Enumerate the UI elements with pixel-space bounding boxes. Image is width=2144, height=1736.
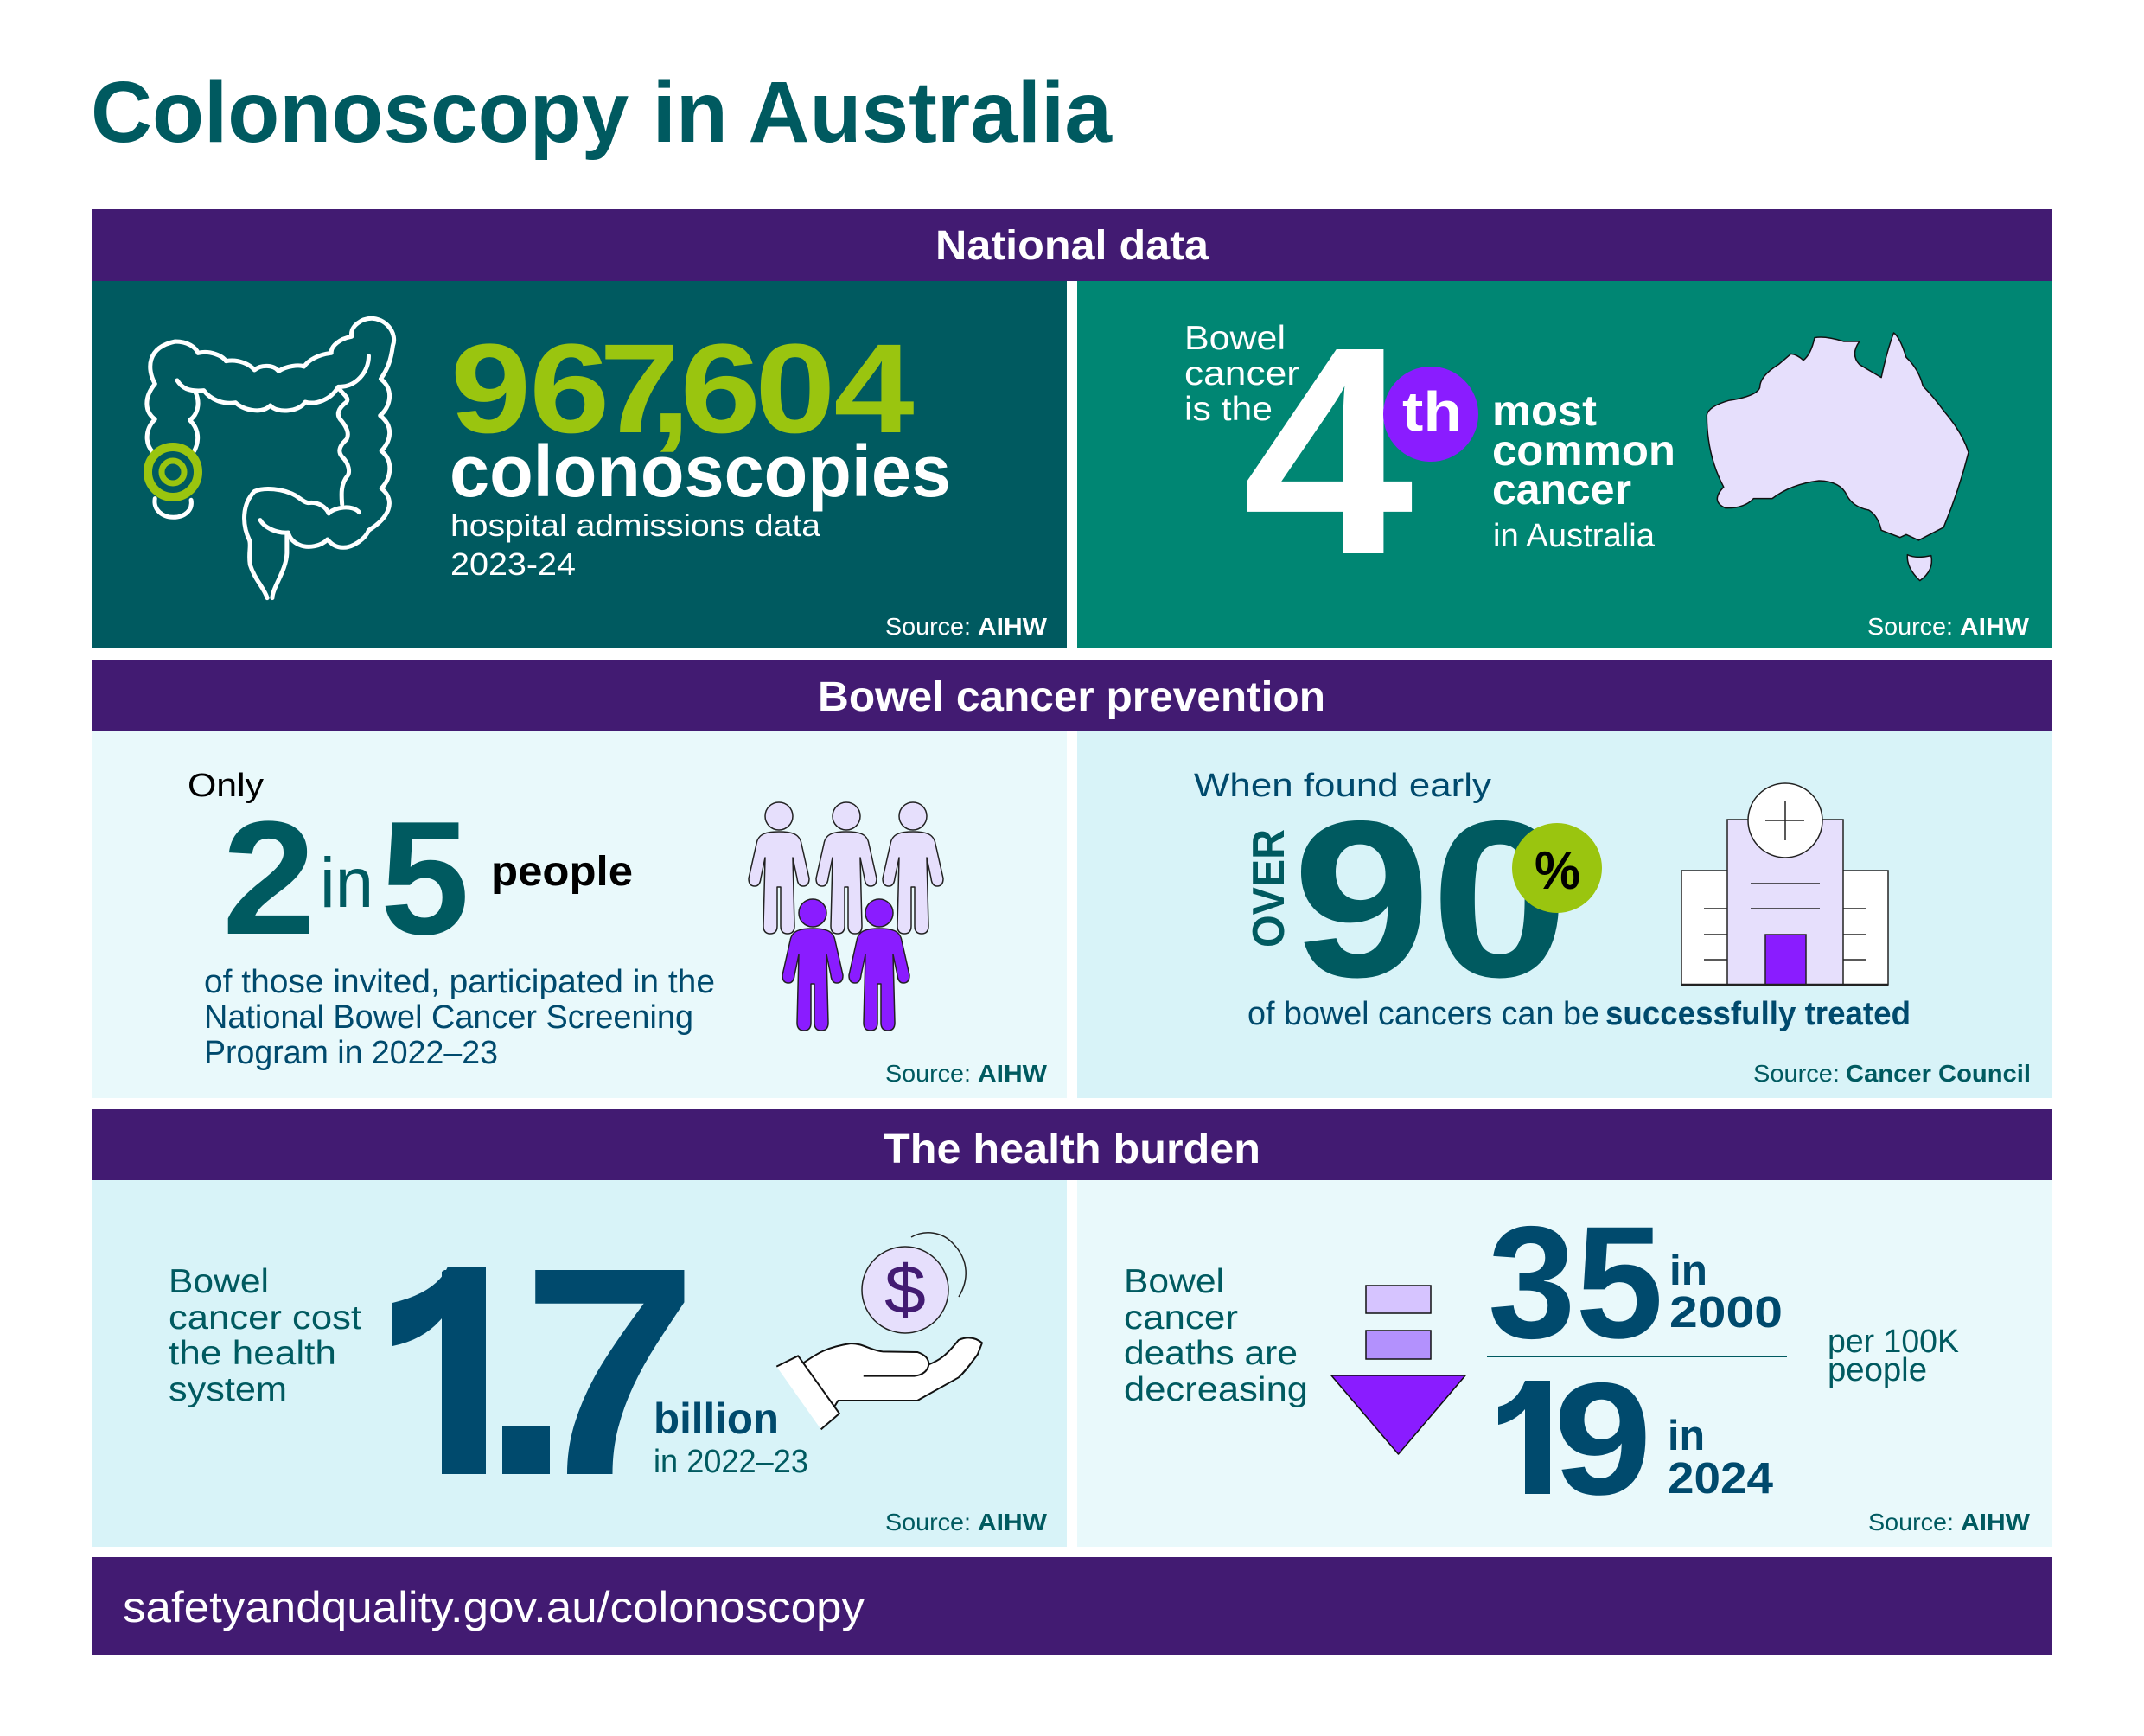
text: Bowel cancer cost the health system: cancer cost — [169, 1299, 361, 1337]
section header: Bowel cancer prevention: Bowel cancer prevention — [818, 674, 1325, 720]
section header: Bowel cancer prevention — [92, 660, 2052, 731]
text: Bowel cancer is the — [1184, 320, 1299, 428]
stat: 19 in 2024: in — [1668, 1413, 1705, 1459]
icon: hospital — [1681, 783, 1888, 985]
title: Colonoscopy in Australia — [91, 64, 1113, 161]
panel: deaths decreasing — [1077, 1180, 2052, 1547]
source — [1753, 1060, 2031, 1087]
text: most common cancer: cancer — [1492, 465, 1631, 514]
icon: five people, two highlighted — [749, 802, 943, 1031]
source: AIHW — [978, 613, 1048, 640]
text: When found early: When found early — [1194, 768, 1491, 804]
text: description: Program in 2022–23 — [204, 1035, 498, 1071]
source: Source: — [1753, 1060, 1840, 1087]
text: most common cancer: in Australia — [1493, 518, 1656, 554]
big stat: 2 in 5: 2 — [222, 788, 316, 968]
panel: colonoscopies count — [92, 281, 1067, 648]
big number 1.7: 1.7 — [368, 1206, 699, 1537]
sub text — [450, 507, 821, 582]
stat: 19 in 2024 — [1498, 1381, 1773, 1496]
source — [885, 1060, 1048, 1087]
icon: map of Australia — [1707, 333, 1969, 581]
source: Source: — [1868, 1509, 1954, 1535]
text: per 100K people — [1828, 1324, 1959, 1388]
text: description: of those invited, participated in the — [204, 964, 715, 1000]
icon: large bowel with target — [147, 318, 394, 598]
text: most common cancer — [1492, 386, 1675, 554]
text: Bowel cancer deaths are decreasing: deaths are — [1124, 1335, 1298, 1372]
text: most common cancer: most — [1492, 386, 1597, 435]
badge: percent: % — [1535, 841, 1580, 901]
stat: 35 in 2000: 2000 — [1669, 1287, 1783, 1337]
text: successfully treated — [1247, 996, 1911, 1032]
text: description — [204, 964, 715, 1071]
footer bar: safetyandquality.gov.au/colonoscopy — [123, 1583, 865, 1631]
text: successfully treated: of bowel cancers can be — [1247, 996, 1599, 1032]
stat: 19 in 2024: 2024 — [1668, 1453, 1774, 1503]
source: AIHW — [978, 1509, 1048, 1535]
text: Bowel cancer is the: cancer — [1184, 355, 1299, 393]
section header: The health burden: The health burden — [884, 1126, 1260, 1172]
section header: The health burden — [92, 1109, 2052, 1180]
text: Bowel cancer deaths are decreasing: Bowel — [1124, 1263, 1224, 1300]
source: AIHW — [1961, 1509, 2031, 1535]
source: AIHW — [978, 1060, 1048, 1087]
badge: th — [1383, 367, 1478, 462]
text: most common cancer: common — [1492, 426, 1675, 475]
text: Bowel cancer deaths are decreasing: cancer — [1124, 1299, 1238, 1337]
sub text: hospital admissions data — [450, 507, 821, 543]
source: Source: — [885, 1060, 971, 1087]
big number 90: 90 — [1292, 774, 1569, 1024]
panel: over 90 percent — [1077, 731, 2052, 1098]
source — [885, 1509, 1048, 1535]
badge: th: th — [1402, 380, 1462, 443]
big stat: 2 in 5: in — [320, 844, 373, 922]
text: Bowel cancer cost the health system: Bowel — [169, 1263, 269, 1300]
big number 4: 4 — [1242, 284, 1415, 616]
big number: 967,604 — [450, 318, 915, 460]
source: Source: — [885, 1509, 971, 1535]
source: Source: — [885, 613, 971, 640]
panel: 4th most common cancer — [1077, 281, 2052, 648]
stat: 19 in 2024: 19 — [1461, 1350, 1652, 1529]
icon: hand holding coin — [776, 1233, 982, 1429]
source: AIHW — [1960, 613, 2030, 640]
footer bar — [92, 1557, 2052, 1655]
text: per 100K people: people — [1828, 1352, 1927, 1388]
section header: National data: National data — [935, 223, 1209, 269]
stat: 35 in 2000: in — [1669, 1248, 1707, 1294]
big number 1.7 — [392, 1267, 685, 1474]
source: Cancer Council — [1846, 1060, 2031, 1087]
icon: downward arrow — [1331, 1286, 1465, 1454]
label: OVER vertical: OVER — [1244, 829, 1294, 948]
text: Bowel cancer cost the health system: system — [169, 1371, 287, 1408]
source: Source: — [1867, 613, 1953, 640]
source — [1867, 613, 2030, 640]
label: billion: billion — [654, 1395, 779, 1443]
text: Only: Only — [188, 768, 264, 804]
text: description: National Bowel Cancer Screening — [204, 999, 693, 1036]
stat: 35 in 2000: 35 — [1488, 1194, 1663, 1372]
text: Bowel cancer deaths are decreasing: decreasing — [1124, 1371, 1308, 1408]
stat: 35 in 2000 — [1488, 1194, 1783, 1372]
text: successfully treated: successfully treated — [1605, 996, 1911, 1032]
panel: 1.7 billion — [92, 1180, 1067, 1547]
big stat: 2 in 5 — [222, 788, 469, 968]
text: Bowel cancer is the: is the — [1184, 391, 1273, 428]
section header: National data — [92, 209, 2052, 281]
text: Bowel cancer is the: Bowel — [1184, 320, 1286, 357]
badge: percent — [1512, 823, 1602, 913]
sub text: 2023-24 — [450, 546, 576, 582]
source — [885, 613, 1048, 640]
source — [1868, 1509, 2031, 1535]
label: colonoscopies: colonoscopies — [450, 431, 951, 512]
divider line — [1487, 1356, 1787, 1357]
text: Bowel cancer cost the health system — [169, 1263, 361, 1408]
text: Bowel cancer cost the health system: the health — [169, 1335, 336, 1372]
text: in 2022-23: in 2022–23 — [654, 1444, 808, 1480]
big stat: 2 in 5: 5 — [380, 788, 469, 968]
icon: hand holding coin: $ — [884, 1251, 926, 1328]
text: Bowel cancer deaths are decreasing — [1124, 1263, 1308, 1408]
label: people: people — [491, 849, 633, 895]
panel: 2 in 5 people — [92, 731, 1067, 1098]
text: per 100K people: per 100K — [1828, 1324, 1959, 1360]
